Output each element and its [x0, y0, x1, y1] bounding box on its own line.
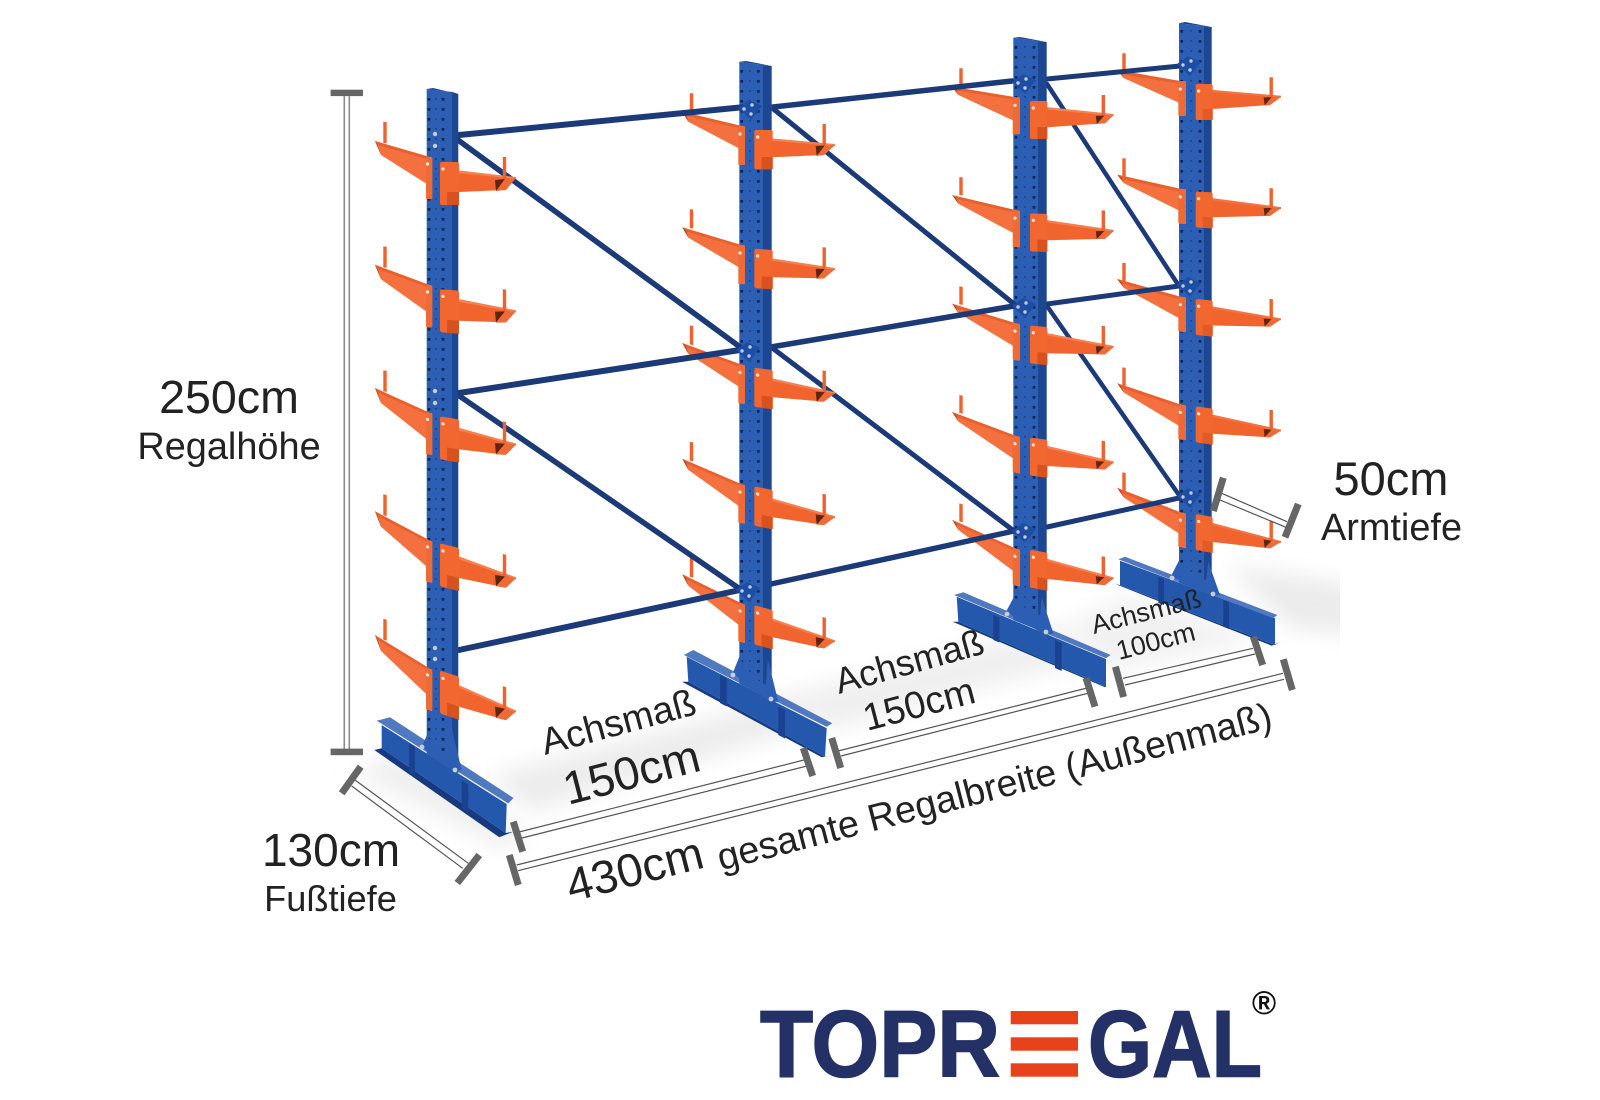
dimension line: shelf height [331, 90, 363, 755]
label: total width: gesamte Regalbreite (Außenmaß) [713, 695, 1276, 879]
post 2 [731, 61, 778, 702]
base foot 3 [953, 592, 1113, 687]
label: shelf height [137, 371, 321, 468]
base foot 1 [374, 717, 514, 837]
dimension line: arm depth [1213, 478, 1298, 537]
label: axis spacing 100cm: Achsmaß [1088, 583, 1204, 640]
cantilever arms left, post 3 [952, 68, 1020, 587]
cantilever arms right, post 4 [1196, 77, 1281, 565]
post 4 [1170, 22, 1220, 596]
label: foot depth: Fußtiefe [264, 878, 397, 919]
cantilever arms left, post 4 [1117, 53, 1186, 548]
post 3 [1005, 37, 1053, 635]
upright 2 with base and cantilever arms [682, 61, 835, 757]
upright 3 with base and cantilever arms [952, 37, 1114, 687]
label: axis spacing 150cm middle [830, 621, 988, 740]
label: total width [560, 695, 1276, 912]
label: shelf height: 250cm [159, 371, 299, 423]
label: foot depth [262, 824, 400, 919]
label: total width: 430cm [560, 826, 709, 912]
dimension line: total width [509, 659, 1292, 885]
cantilever arms left, post 2 [682, 93, 745, 643]
logo: TOPREGAL: TOPR [760, 991, 1000, 1097]
logo: TOPREGAL: GAL [1088, 991, 1262, 1097]
dimension line: axis spacing 1 [513, 748, 813, 852]
floor shadows [356, 565, 1360, 850]
label: axis spacing 100cm: 100cm [1113, 616, 1198, 666]
cantilever arms right, post 1 [440, 157, 516, 739]
base foot 2 [682, 650, 833, 757]
logo: TOPREGAL: ® [1252, 984, 1276, 1021]
label: axis spacing 150cm left: Achsmaß [536, 681, 700, 763]
cantilever arms left, post 1 [375, 122, 432, 711]
label: axis spacing 150cm left [536, 681, 705, 815]
cross bars between uprights 1 and 2 [458, 100, 762, 650]
upright 1 with base and cantilever arms [374, 88, 516, 837]
label: arm depth: 50cm [1334, 452, 1448, 505]
label: arm depth [1321, 452, 1462, 549]
dimension line: axis spacing 2 [832, 678, 1095, 768]
cross bars between uprights 2 and 3 [771, 74, 1036, 584]
label: axis spacing 150cm middle: Achsmaß [830, 621, 988, 702]
label: foot depth: 130cm [262, 824, 400, 876]
label: axis spacing 100cm [1088, 583, 1204, 666]
label: shelf height: Regalhöhe [137, 426, 321, 468]
cross bars between uprights 3 and 4 [1047, 56, 1201, 527]
upright 4 with base and cantilever arms [1116, 22, 1281, 646]
label: axis spacing 150cm middle: 150cm [859, 670, 980, 740]
cantilever arms right, post 3 [1030, 95, 1114, 602]
logo: TOPREGAL [760, 984, 1276, 1097]
post 1 [420, 88, 462, 773]
dimension line: axis spacing 3 [1115, 637, 1263, 697]
cantilever arms right, post 2 [754, 124, 835, 665]
base foot 4 [1116, 557, 1280, 646]
label: axis spacing 150cm left: 150cm [557, 729, 705, 815]
label: arm depth: Armtiefe [1321, 507, 1462, 549]
dimension line: foot depth [342, 767, 479, 883]
